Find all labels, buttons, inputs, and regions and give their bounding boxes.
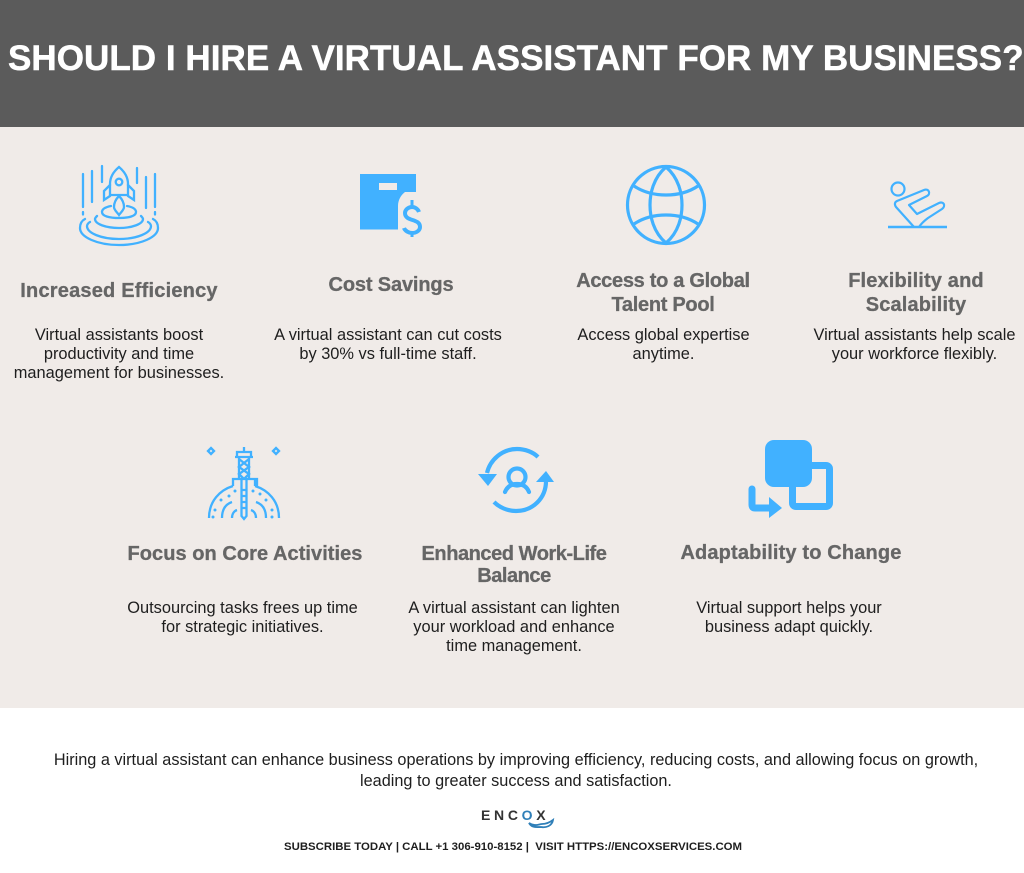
text: Adaptability to Change bbox=[696, 599, 882, 636]
text: Increased Efficiency bbox=[14, 326, 224, 382]
icon: globe bbox=[626, 164, 706, 246]
heading: Flexibility and Scalability: Scalability bbox=[866, 294, 966, 316]
text: Flexibility and Scalability: your workforce flexibly. bbox=[832, 345, 997, 363]
heading: Flexibility and Scalability bbox=[848, 270, 984, 316]
text: Increased Efficiency: productivity and time bbox=[44, 345, 194, 363]
text: Flexibility and Scalability bbox=[814, 326, 1015, 363]
icon: work-life cycle bbox=[478, 446, 554, 514]
icon: cost savings bbox=[360, 174, 422, 237]
heading: Enhanced Work-Life Balance bbox=[422, 543, 606, 587]
panel: benefits bbox=[0, 127, 1024, 708]
text: Cost Savings: A virtual assistant can cut costs bbox=[274, 326, 502, 344]
title banner bbox=[0, 0, 1024, 127]
logo: ENCOX bbox=[481, 807, 554, 828]
text: Focus on Core Activities: Outsourcing tasks frees up time bbox=[127, 599, 358, 617]
conclusion text bbox=[54, 751, 978, 790]
text: Enhanced Work-Life Balance: time management. bbox=[446, 637, 582, 655]
text: Adaptability to Change: Virtual support helps your bbox=[696, 599, 882, 617]
text: Enhanced Work-Life Balance bbox=[408, 599, 620, 655]
heading: Flexibility and Scalability: Flexibility and bbox=[848, 270, 984, 292]
footer contact line: SUBSCRIBE TODAY | CALL +1 306-910-8152 | VISIT HTTPS://ENCOXSERVICES.COM bbox=[284, 841, 742, 853]
icon: flexibility bbox=[888, 181, 947, 228]
text: Access to a Global Talent Pool bbox=[577, 326, 750, 363]
heading: Access to a Global Talent Pool bbox=[576, 270, 750, 316]
text: Access to a Global Talent Pool: anytime. bbox=[633, 345, 694, 363]
text: Enhanced Work-Life Balance: your workload and enhance bbox=[413, 618, 615, 636]
heading: Adaptability to Change: Adaptability to Change bbox=[680, 542, 902, 564]
text: Increased Efficiency: management for businesses. bbox=[14, 364, 224, 382]
icon: drilling tower bbox=[206, 446, 280, 521]
logo: ENCOX: ENCOX bbox=[481, 807, 549, 823]
heading: Enhanced Work-Life Balance: Enhanced Work-Life bbox=[422, 543, 606, 565]
heading: Access to a Global Talent Pool: Access to a Global bbox=[576, 270, 750, 292]
text: Access to a Global Talent Pool: Access global expertise bbox=[577, 326, 750, 344]
conclusion text: Hiring a virtual assistant can enhance business operations by improving efficiency, reducing costs, and allowing focus on growth, bbox=[54, 751, 978, 769]
text: Increased Efficiency: Virtual assistants boost bbox=[35, 326, 203, 344]
heading: Increased Efficiency: Increased Efficiency bbox=[20, 280, 218, 302]
text: Flexibility and Scalability: Virtual assistants help scale bbox=[814, 326, 1015, 344]
icon: adaptability bbox=[748, 440, 833, 518]
text: Adaptability to Change: business adapt quickly. bbox=[705, 618, 873, 636]
heading: Access to a Global Talent Pool: Talent Pool bbox=[612, 294, 714, 316]
heading: Cost Savings: Cost Savings bbox=[329, 274, 453, 296]
heading: Focus on Core Activities: Focus on Core Activities bbox=[128, 543, 362, 565]
text: Focus on Core Activities bbox=[127, 599, 358, 636]
icon: rocket bbox=[78, 164, 160, 246]
text: Cost Savings: by 30% vs full-time staff. bbox=[299, 345, 477, 363]
text: Cost Savings bbox=[274, 326, 502, 363]
heading: Enhanced Work-Life Balance: Balance bbox=[477, 565, 551, 587]
conclusion text: leading to greater success and satisfaction. bbox=[360, 772, 672, 790]
title: SHOULD I HIRE A VIRTUAL ASSISTANT FOR MY BUSINESS? bbox=[8, 39, 1024, 78]
text: Enhanced Work-Life Balance: A virtual assistant can lighten bbox=[408, 599, 620, 617]
text: Focus on Core Activities: for strategic initiatives. bbox=[161, 618, 324, 636]
